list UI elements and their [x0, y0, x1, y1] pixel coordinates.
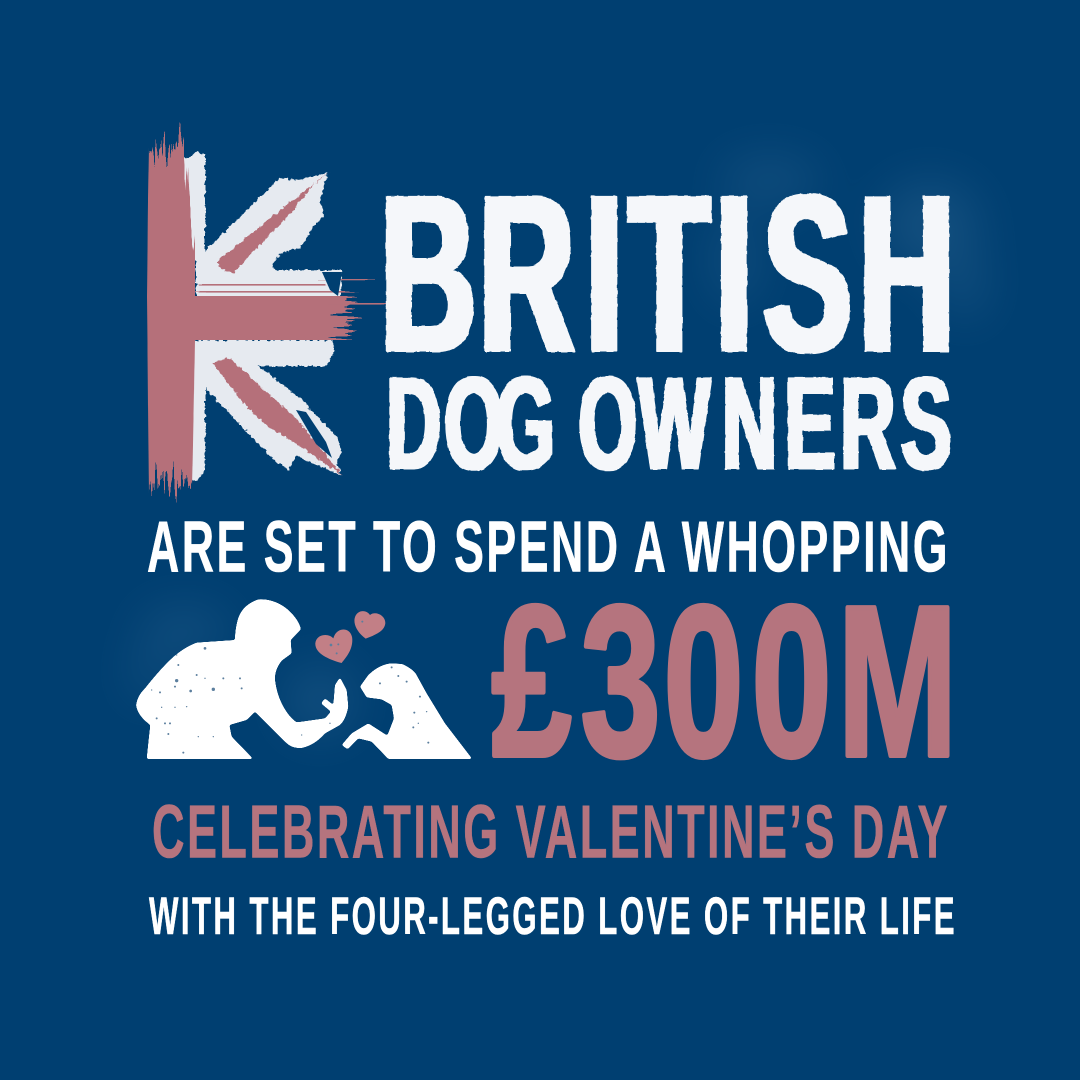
person silhouette	[136, 599, 348, 759]
speckle texture	[151, 621, 429, 754]
heart: large	[315, 630, 352, 663]
icon: person and dog silhouette with hearts	[136, 599, 472, 759]
title line: DOG OWNERS: DOG OWNERS	[386, 350, 951, 497]
flag: rose diagonal stripes	[212, 172, 343, 476]
figure: £300M: £300M	[492, 560, 957, 801]
icon: brushed Union Jack flag	[147, 148, 380, 482]
title line: BRITISH: BRITISH	[381, 149, 954, 399]
flag: rose vertical bar	[147, 148, 195, 482]
flag: rose horizontal bar	[170, 279, 380, 340]
dog silhouette	[342, 663, 472, 759]
flag: white diagonals and bands	[180, 152, 342, 482]
heart: small	[354, 611, 385, 639]
flag: dark brush marks	[296, 272, 342, 458]
